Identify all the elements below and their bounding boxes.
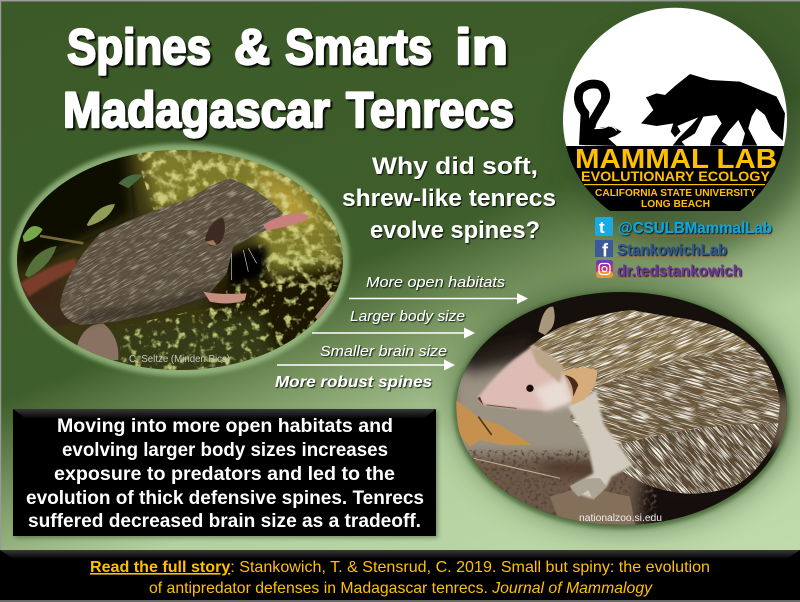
summary text box [13,409,438,538]
summary text: exposure to predators and led to the [54,464,395,485]
icon: twitter: t [599,218,605,237]
photo credit: nationalzoo.si.edu [579,512,662,524]
icon: instagram [596,260,613,278]
logo lettering: MAMMAL LAB [575,143,777,174]
icon: facebook [595,240,613,260]
icon: facebook: f [602,240,609,260]
question heading [342,153,556,244]
logo lettering [576,149,776,207]
arrow: smaller brain size [277,343,455,370]
question heading: shrew-like tenrecs [342,185,556,212]
title: Madagascar [63,82,330,138]
summary text [26,416,424,532]
title: & [234,19,270,75]
arrow: larger body size [312,308,475,338]
logo lettering: EVOLUTIONARY ECOLOGY [581,168,771,184]
arrow: smaller brain size: Smaller brain size [320,343,447,360]
question heading: evolve spines? [370,217,540,244]
logo lettering: LONG BEACH [641,198,710,210]
summary text: suffered decreased brain size as a tradeoff. [28,511,421,532]
icon: coyote silhouette [641,74,785,146]
title: in [455,19,508,75]
title: Smarts [285,19,432,75]
photo: spiny lesser hedgehog tenrec [450,290,800,540]
photo credit: C. Seltze (Minden Pics) [129,354,230,365]
arrow: more open habitats [349,274,528,304]
question heading: Why did soft, [372,153,538,180]
title [63,19,514,138]
icon: skunk silhouette [578,84,622,146]
instagram handle: dr.tedstankowich [617,263,742,280]
photo: shrew-like tenrec in moss [11,144,349,376]
title: Tenrecs [346,82,514,138]
facebook handle: StankowichLab [617,242,727,259]
twitter handle: @CSULBMammalLab [618,220,772,237]
shrew body fur [60,178,283,325]
summary text: Moving into more open habitats and [57,416,393,437]
citation text [90,559,710,597]
title: Spines [67,19,211,75]
arrow: larger body size: Larger body size [350,308,465,325]
tenrec spines [530,310,780,494]
label: more robust spines: More robust spines [275,374,432,391]
social media links [595,217,772,280]
logo lettering: CALIFORNIA STATE UNIVERSITY [595,187,756,199]
footer citation bar [0,550,800,602]
icon: twitter [595,217,613,237]
citation text: Read the full story: Stankowich, T. & Stensrud, C. 2019. Small but spiny: the evolution [90,559,710,576]
logo: Mammal Lab [560,0,790,212]
summary text: evolution of thick defensive spines. Tenrecs [26,488,424,509]
citation text: of antipredator defenses in Madagascar tenrecs. Journal of Mammalogy [149,580,653,597]
summary text: evolving larger body sizes increases [62,440,388,461]
arrow: more open habitats: More open habitats [366,274,506,291]
